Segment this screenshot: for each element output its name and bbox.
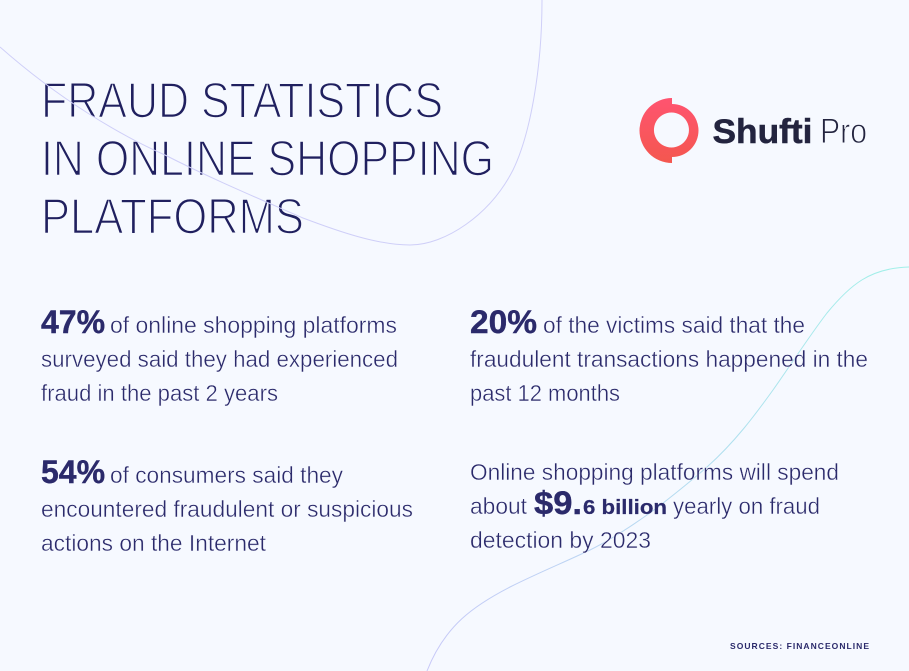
stat: $9.6 billion spend (470, 459, 839, 553)
stat: 20% of victims: 20% (470, 304, 537, 340)
stat: 47% of platforms: of online shopping platforms (110, 312, 397, 338)
stat: $9.6 billion spend: 6 billion (583, 497, 667, 519)
stat: 54% of consumers: actions on the Internet (41, 530, 267, 556)
stat: $9.6 billion spend: yearly on fraud (673, 493, 820, 519)
decorative curve: teal (427, 267, 909, 671)
stat: $9.6 billion spend: about (470, 493, 528, 519)
decorative curve: purple (0, 0, 542, 245)
stat: 54% of consumers: of consumers said they (110, 462, 343, 488)
title: PLATFORMS (41, 188, 304, 244)
logo: Shufti Pro (640, 98, 867, 163)
title (41, 72, 494, 244)
logo wordmark (712, 112, 867, 151)
title: IN ONLINE SHOPPING (41, 130, 494, 186)
stat: 47% of platforms: fraud in the past 2 years (41, 380, 278, 406)
stat: 54% of consumers (41, 454, 413, 556)
stat: 47% of platforms (41, 304, 398, 406)
title: FRAUD STATISTICS (41, 72, 443, 128)
stat: $9.6 billion spend: detection by 2023 (470, 527, 651, 553)
stat: 20% of victims (470, 304, 868, 406)
icon: logo ring (640, 98, 698, 163)
stat: $9.6 billion spend: Online shopping platforms will spend (470, 459, 839, 485)
stat: 20% of victims: fraudulent transactions happened in the (470, 346, 868, 372)
stat: 20% of victims: past 12 months (470, 380, 620, 406)
source note: SOURCES: FINANCEONLINE (730, 641, 869, 651)
stat: 20% of victims: of the victims said that the (543, 312, 805, 338)
stat: 47% of platforms: 47% (41, 304, 105, 340)
stat: $9.6 billion spend: $9. (534, 485, 582, 521)
stat: 54% of consumers: encountered fraudulent or suspicious (41, 496, 413, 522)
stat: 47% of platforms: surveyed said they had experienced (41, 346, 398, 372)
logo wordmark: Pro (820, 112, 867, 151)
stat: 54% of consumers: 54% (41, 454, 105, 490)
logo wordmark: Shufti (712, 113, 812, 151)
